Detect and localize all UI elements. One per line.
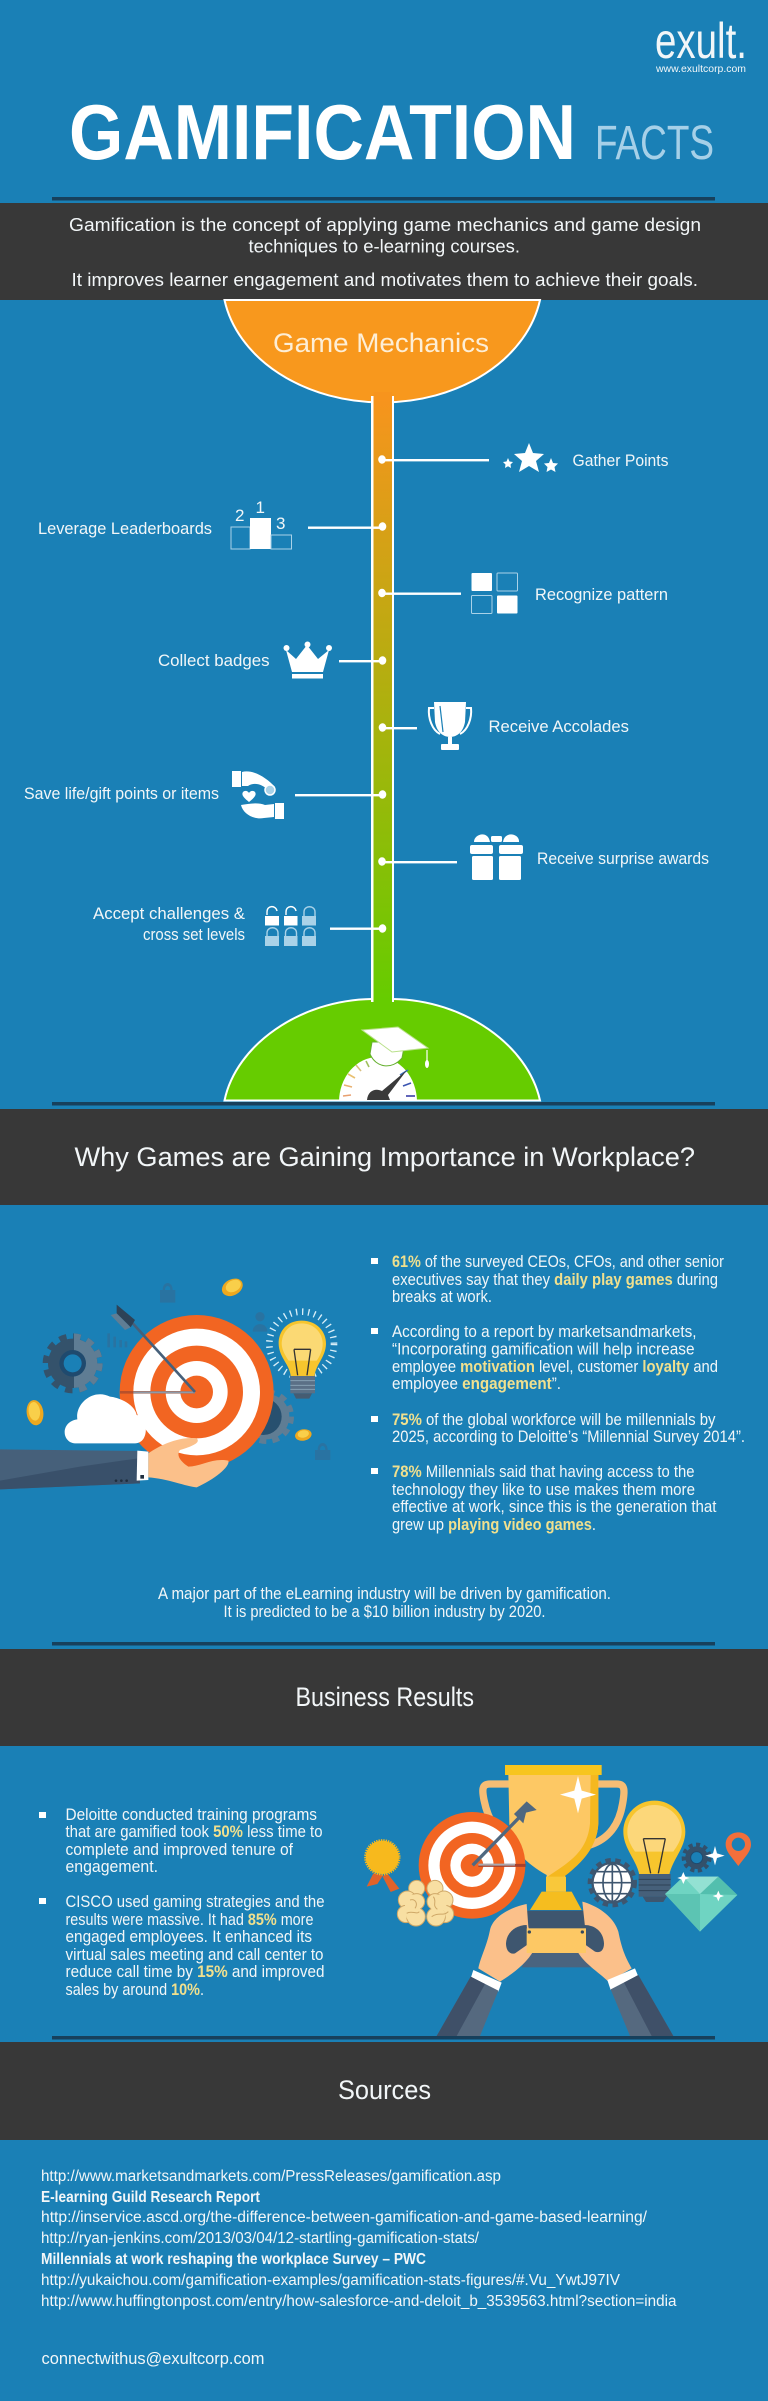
fact: 61%: executives say that they daily play games during	[392, 1270, 718, 1289]
diamond	[665, 1872, 737, 1932]
icon: crown	[284, 642, 332, 678]
text block: sources list	[41, 2168, 677, 2310]
item: accept challenges: cross set levels	[143, 926, 245, 944]
item: accept challenges	[93, 905, 316, 946]
fact: 78%	[371, 1462, 717, 1534]
target	[419, 1801, 537, 1919]
item: save life or gift points	[24, 771, 284, 819]
panel: business results facts	[39, 1805, 324, 1999]
small gear	[684, 1845, 725, 1870]
brain	[397, 1880, 454, 1926]
fact: marketsandmarkets: employee motivation level, customer loyalty and	[392, 1357, 718, 1376]
arm and hand	[0, 1438, 229, 1489]
item: leverage leaderboards: Leverage Leaderboards	[38, 520, 212, 538]
logo: exult: www.exultcorp.com	[655, 63, 746, 75]
bowl: game mechanics	[224, 300, 540, 402]
item: recognize pattern	[472, 573, 668, 614]
fact: deloitte: engagement.	[66, 1857, 158, 1876]
icon: podium: 1	[256, 498, 265, 517]
fact: deloitte: Deloitte conducted training programs	[66, 1805, 317, 1824]
contact email: connectwithus@exultcorp.com	[42, 2349, 264, 2368]
icon: locks	[265, 907, 316, 946]
item: receive surprise awards	[470, 834, 709, 880]
fact: 61%: 61% of the surveyed CEOs, CFOs, and other senior	[392, 1252, 724, 1271]
item: collect badges	[158, 642, 332, 678]
icon: trophy	[429, 702, 471, 750]
fact: cisco: CISCO used gaming strategies and the	[66, 1892, 324, 1911]
medal	[366, 1841, 399, 1892]
icon: pattern squares	[472, 573, 518, 614]
item: receive surprise awards: Receive surprise awards	[537, 850, 709, 868]
panel: introduction band	[0, 203, 768, 300]
target	[120, 1315, 274, 1469]
text block: sources list: http://inservice.ascd.org/the-difference-between-gamification-and-game-based-learning/	[41, 2209, 648, 2226]
icon: giving hands	[232, 771, 284, 819]
icon: podium: 2	[235, 506, 244, 525]
hands and controller	[437, 1902, 673, 2036]
arrow	[111, 1305, 195, 1392]
text block: sources list: Millennials at work reshaping the workplace Survey – PWC	[41, 2251, 426, 2268]
cloud	[65, 1394, 146, 1443]
heading band: sources	[0, 2042, 768, 2140]
icon: stars	[503, 443, 558, 472]
panel: introduction band: It improves learner engagement and motivates them to achieve their goals.	[72, 269, 698, 290]
icon: gift box	[470, 834, 523, 880]
title: GAMIFICATION	[69, 88, 576, 176]
fact: marketsandmarkets: According to a report by marketsandmarkets,	[392, 1322, 696, 1341]
item: save life or gift points: Save life/gift points or items	[24, 785, 219, 803]
heading band: business results: Business Results	[296, 1682, 474, 1712]
icon: podium	[231, 498, 292, 549]
text block: industry prediction: It is predicted to be a $10 billion industry by 2020.	[224, 1602, 546, 1621]
heading band: business results	[0, 1649, 768, 1746]
gear: right	[243, 1393, 291, 1441]
panel: introduction band: Gamification is the concept of applying game mechanics and game design	[69, 214, 701, 235]
globe gear	[590, 1861, 634, 1905]
fact: 75%: 75% of the global workforce will be millennials by	[392, 1410, 716, 1429]
fact: 78%: 78% Millennials said that having access to the	[392, 1462, 694, 1481]
dome: base	[224, 999, 540, 1100]
illustration: trophy and controller	[366, 1765, 751, 2036]
fact: 61%	[371, 1252, 724, 1306]
fact: deloitte: that are gamified took 50% less time to	[66, 1822, 322, 1841]
title: FACTS	[595, 117, 714, 170]
icon: gauge with graduation cap	[339, 1026, 430, 1100]
heading band: why games: Why Games are Gaining Importance in Workplace?	[74, 1142, 695, 1172]
fact: marketsandmarkets: employee engagement”.	[392, 1374, 561, 1393]
fact: 61%: breaks at work.	[392, 1287, 492, 1306]
item: leverage leaderboards	[38, 498, 292, 549]
heading band: sources: Sources	[338, 2075, 431, 2105]
fact: cisco: results were massive. It had 85% more	[66, 1910, 314, 1929]
fact: 78%: grew up playing video games.	[392, 1515, 596, 1534]
bowl: game mechanics: Game Mechanics	[273, 328, 489, 358]
text block: industry prediction	[158, 1584, 611, 1621]
fact: 78%: effective at work, since this is the generation that	[392, 1497, 717, 1516]
panel: introduction band: techniques to e-learning courses.	[248, 236, 520, 256]
bulb	[623, 1801, 685, 1902]
stem	[371, 392, 394, 1004]
icon: podium: 3	[276, 514, 285, 533]
item: receive accolades: Receive Accolades	[488, 718, 629, 736]
fact: deloitte	[39, 1805, 322, 1876]
item: accept challenges: Accept challenges &	[93, 905, 245, 923]
fact: cisco	[39, 1892, 324, 1999]
item: recognize pattern: Recognize pattern	[535, 586, 668, 604]
panel: why games facts	[371, 1252, 745, 1534]
heading band: why games	[0, 1109, 768, 1205]
panel: game mechanics thermometer	[24, 300, 709, 1147]
text block: sources list: http://yukaichou.com/gamification-examples/gamification-stats-figures/#.Vu_YwtJ97IV	[41, 2272, 621, 2289]
fact: cisco: sales by around 10%.	[66, 1980, 204, 1999]
map pin	[726, 1832, 751, 1866]
item: receive accolades	[429, 702, 629, 750]
coins	[25, 1275, 313, 1442]
gear: left	[46, 1337, 99, 1390]
item: gather points	[503, 443, 668, 472]
text block: sources list: http://www.marketsandmarkets.com/PressReleases/gamification.asp	[41, 2168, 501, 2185]
fact: marketsandmarkets	[371, 1322, 718, 1393]
fact: deloitte: complete and improved tenure of	[66, 1840, 293, 1859]
fact: cisco: engaged employees. It enhanced its	[66, 1927, 312, 1946]
item: gather points: Gather Points	[572, 452, 668, 470]
fact: marketsandmarkets: “Incorporating gamification will help increase	[392, 1340, 694, 1358]
trophy	[483, 1765, 624, 1910]
illustration: hand holding target	[0, 1275, 334, 1489]
fact: 78%: technology they like to use makes them more	[392, 1480, 695, 1499]
fact: cisco: reduce call time by 15% and improved	[66, 1962, 324, 1981]
icon: light bulb	[269, 1312, 334, 1399]
connector dots and lines	[295, 455, 489, 933]
text block: industry prediction: A major part of the eLearning industry will be driven by gamification.	[158, 1584, 611, 1603]
fact: 75%	[371, 1410, 745, 1446]
item: collect badges: Collect badges	[158, 652, 270, 670]
fact: cisco: virtual sales meeting and call center to	[66, 1945, 324, 1964]
text block: sources list: http://www.huffingtonpost.com/entry/how-salesforce-and-deloit_b_3539563.html?section=india	[41, 2293, 677, 2310]
text block: sources list: http://ryan-jenkins.com/2013/03/04/12-startling-gamification-stats/	[41, 2230, 480, 2247]
text block: sources list: E-learning Guild Research Report	[41, 2189, 260, 2206]
